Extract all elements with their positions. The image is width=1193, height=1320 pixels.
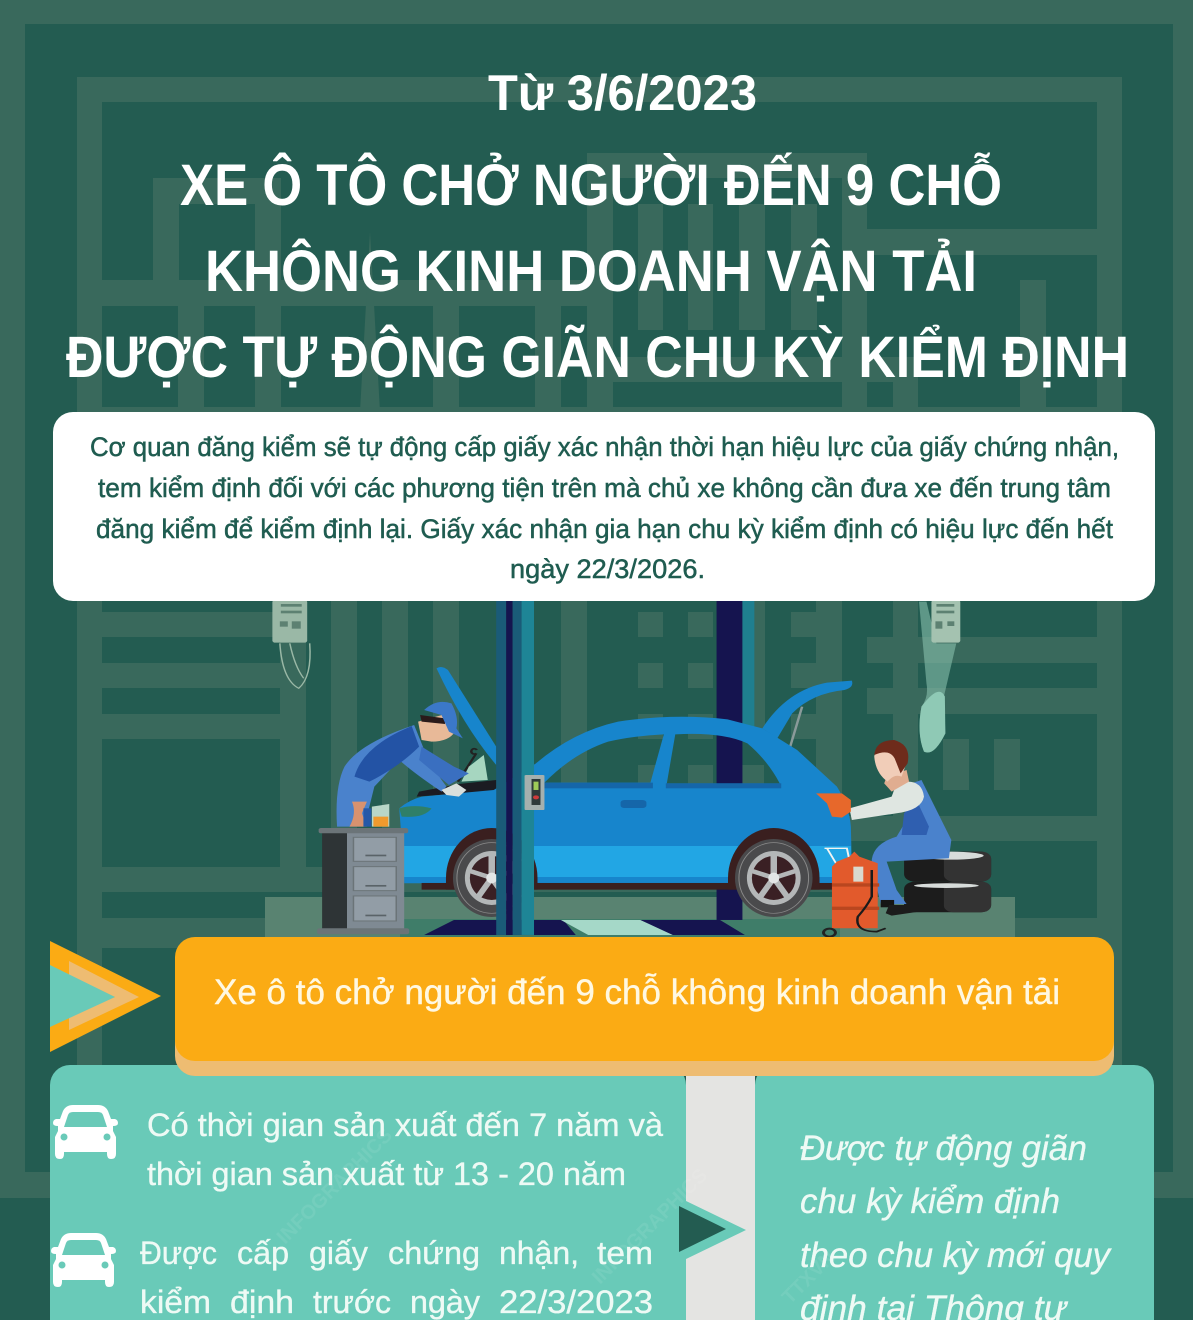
icon: banner arrow: [50, 941, 161, 1052]
right mechanic: [816, 740, 951, 916]
condition 1 text: Có thời gian sản xuất đến 7 năm và: [147, 1107, 663, 1143]
panel: left conditions: [50, 1065, 686, 1320]
grey connector column: [686, 1070, 755, 1320]
condition 2 text: Được: [140, 1235, 217, 1271]
condition 2 text: định: [230, 1284, 294, 1320]
watermark: TTXVN: [778, 1247, 840, 1309]
watermark: INFOGRAPHICS: [273, 1125, 397, 1249]
condition 2 text: cấp: [237, 1235, 289, 1271]
panel: intro text: Cơ quan đăng kiểm sẽ tự động cấp giấy xác nhận thời hạn hiệu lực của giấy chứng nhận,: [90, 432, 1119, 462]
title: XE Ô TÔ CHỞ NGƯỜI ĐẾN 9 CHỖ: [180, 153, 1002, 218]
condition 2 text: [140, 1235, 653, 1320]
panel: intro text: tem kiểm định đối với các phương tiện trên mà chủ xe không cần đưa xe đến trung tâm: [98, 473, 1111, 503]
condition 2 text: ngày: [410, 1284, 480, 1320]
tool cabinet: [317, 804, 409, 934]
condition 2 text: tem: [597, 1235, 653, 1271]
panel: intro text: đăng kiểm để kiểm định lại. Giấy xác nhận gia hạn chu kỳ kiểm định có hiệu lực đến hết: [96, 514, 1113, 544]
category banner: Xe ô tô chở người đến 9 chỗ không kinh doanh vận tải: [214, 973, 1060, 1012]
title: [66, 153, 1129, 390]
icon: car 2: [51, 1233, 116, 1287]
illustration: mechanics servicing a car on a lift: [272, 600, 991, 937]
arrow: connector: [679, 1200, 746, 1260]
category banner: [175, 937, 1114, 1076]
condition 2 text: giấy: [309, 1235, 368, 1271]
condition 1 text: [147, 1107, 663, 1192]
panel: result: Được tự động giãn: [800, 1129, 1087, 1168]
tires stack: [904, 852, 991, 912]
date heading: Từ 3/6/2023: [488, 65, 757, 121]
left mechanic: [337, 702, 469, 827]
car: [399, 667, 852, 917]
condition 2 text: chứng: [388, 1235, 480, 1271]
icon: car 1: [53, 1105, 118, 1159]
watermark: [273, 1125, 840, 1309]
panel: result: chu kỳ kiểm định: [800, 1182, 1060, 1221]
title: KHÔNG KINH DOANH VẬN TẢI: [205, 239, 977, 304]
condition 1 text: thời gian sản xuất từ 13 - 20 năm: [147, 1156, 626, 1192]
gas canister: [824, 848, 886, 937]
condition 2 text: nhận,: [499, 1235, 579, 1271]
panel: result: theo chu kỳ mới quy: [800, 1236, 1112, 1275]
panel: result: [755, 1065, 1154, 1320]
condition 2 text: kiểm: [140, 1284, 211, 1320]
icon: left wall control box: [272, 600, 310, 688]
watermark: INFOGRAPHICS: [588, 1165, 712, 1289]
icon: right wall control box with hose: [919, 600, 960, 753]
panel: intro text: [53, 412, 1155, 601]
lift rear column: [717, 600, 754, 920]
panel: intro text: ngày 22/3/2026.: [510, 554, 705, 584]
lift base: [424, 920, 745, 935]
floor: [265, 897, 1015, 942]
lift front column: [496, 600, 544, 935]
condition 2 text: trước: [313, 1284, 391, 1320]
condition 2 text: 22/3/2023: [499, 1284, 653, 1320]
